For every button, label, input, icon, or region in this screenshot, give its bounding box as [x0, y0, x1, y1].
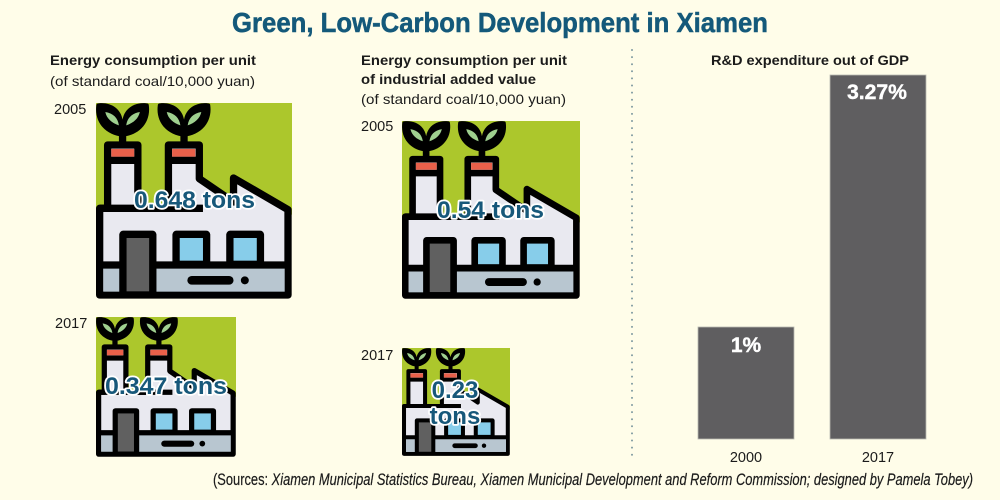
- year 2005: 2005: [361, 119, 393, 135]
- heading: energy per industrial added value: Energy consumption per unit: [361, 52, 567, 68]
- unit note: (of standard coal/10,000 yuan): [361, 91, 566, 107]
- dotted divider: [631, 50, 633, 458]
- value 1%: 1%: [731, 334, 761, 357]
- year 2017: 2017: [361, 348, 393, 364]
- year 2005: 2005: [54, 102, 86, 118]
- value 0.648 tons: 0.648 tons: [134, 187, 255, 214]
- bar 2017: [830, 75, 926, 439]
- icon: factory 2005: [402, 121, 580, 297]
- bar 2000: [698, 327, 794, 439]
- icon: factory 2017: [402, 348, 510, 455]
- value 0.23 tons: 0.23: [432, 377, 478, 404]
- panel: energy per industrial added value: [361, 52, 580, 455]
- label 2017: 2017: [862, 450, 894, 466]
- panel: R&D bar chart: [698, 52, 926, 466]
- value 0.54 tons: 0.54 tons: [437, 197, 544, 224]
- value 0.347 tons: 0.347 tons: [105, 373, 227, 400]
- title: Green, Low-Carbon Development in Xiamen: [232, 7, 768, 38]
- icon: factory 2017: [96, 317, 236, 456]
- unit note: (of standard coal/10,000 yuan): [50, 73, 255, 89]
- chart heading: R&D expenditure out of GDP: [711, 52, 909, 68]
- heading: energy per unit: Energy consumption per unit: [50, 52, 256, 68]
- heading line 2: of industrial added value: [361, 71, 536, 87]
- year 2017: 2017: [55, 316, 87, 332]
- label 2000: 2000: [730, 450, 762, 466]
- panel: energy consumption per unit: [50, 52, 292, 456]
- value 0.23 tons: tons: [430, 403, 480, 430]
- value 0.23 tons: [430, 377, 480, 430]
- icon: factory 2005: [96, 103, 292, 297]
- value 3.27%: 3.27%: [847, 81, 907, 104]
